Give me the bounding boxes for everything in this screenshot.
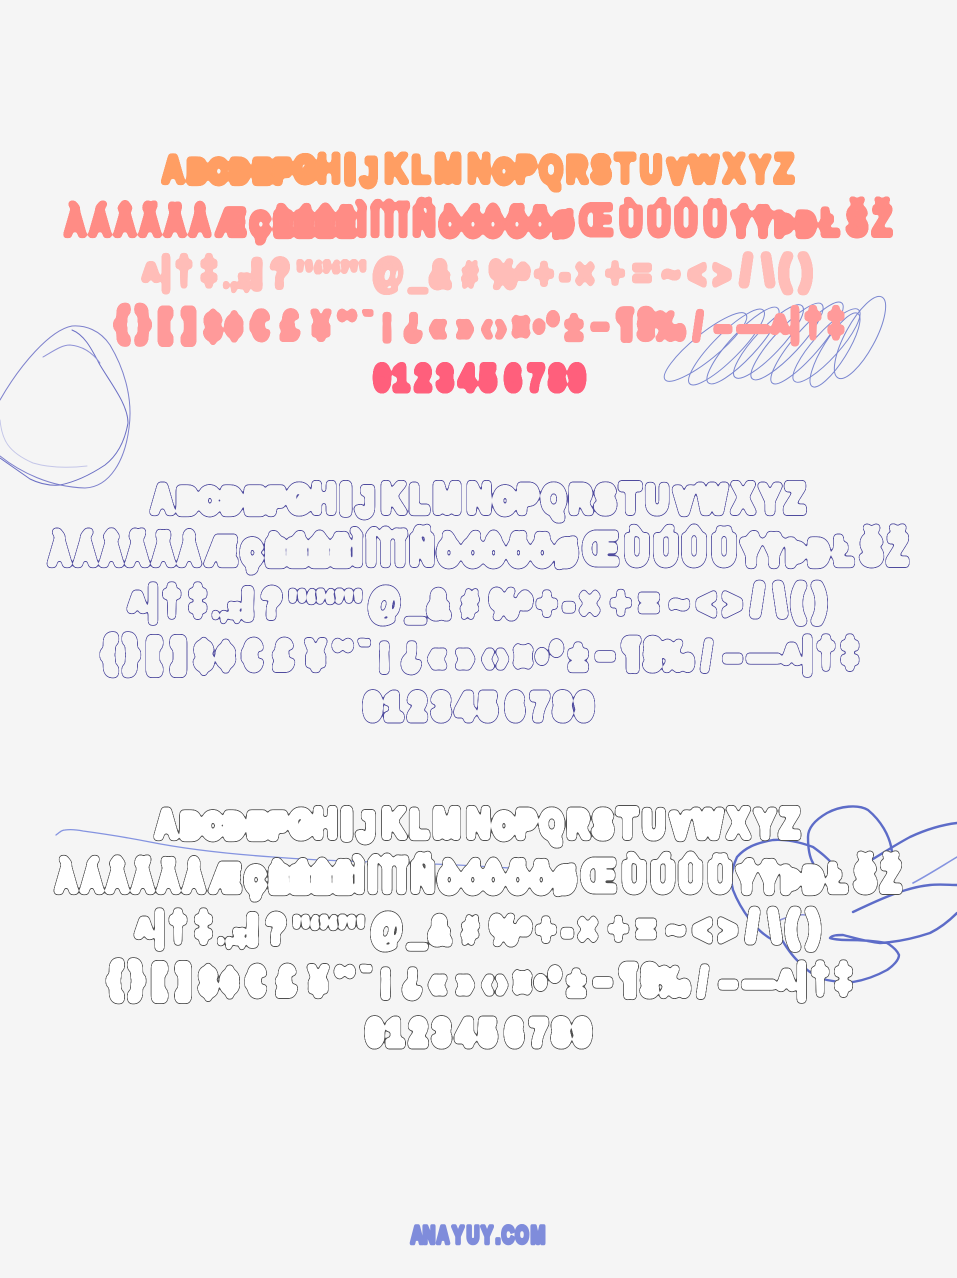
white symbols row: []: [155, 963, 188, 998]
white punctuation row: |†‡: [155, 906, 212, 948]
white symbols row: ¶§: [620, 958, 658, 1000]
outline symbols row: []: [150, 636, 183, 672]
outline symbols row: ^: [784, 640, 799, 677]
scribble: long wavy line, lower section: [56, 830, 510, 868]
filled symbols row: €£¥: [251, 302, 330, 348]
filled symbols row: «»‹›¤•°±−: [430, 307, 608, 348]
filled symbols row: []: [161, 307, 193, 342]
filled symbols row: ‰/–—: [656, 307, 768, 348]
white symbols row: ¡¿: [381, 957, 421, 999]
white alphabet row: J: [357, 804, 375, 850]
outline numerals row: 0123456789: [364, 688, 593, 728]
white symbols row: ^: [779, 967, 794, 1003]
outline symbols row: «»‹›¤•°±−: [429, 636, 614, 678]
white symbols row: |†‡: [798, 958, 852, 1000]
white punctuation row: ^: [137, 915, 152, 951]
white punctuation row: /\(): [748, 906, 819, 948]
outline symbols row: |†‡: [803, 632, 858, 674]
outline punctuation row: /\(): [753, 580, 825, 622]
filled alphabet row: LMNOPQRSTU VWXYZ: [412, 145, 794, 191]
outline symbols row: ‰/–—: [663, 636, 780, 678]
white symbols row: $¢: [200, 962, 238, 1004]
outline accented letters row: ÀÁÂÃÄÅÆÇÈÉÊËÌÍÎÏÑÒÓÔÕÖØŒÙÚÛÜ ÝŸÞÐŁ ŠŽ: [49, 525, 908, 574]
white numerals row: 0123456789: [366, 1013, 591, 1054]
outline symbols row: {}: [104, 631, 137, 673]
filled symbols row: ^: [773, 311, 788, 347]
outline symbols row: ¡¿: [379, 631, 420, 673]
filled alphabet row: ABCDEFGHI: [163, 145, 354, 191]
section: purple outline specimen: [49, 474, 908, 728]
white symbols row: ‰/–—: [659, 962, 774, 1004]
filled punctuation row: .,:;: [223, 264, 250, 293]
outline punctuation row: ^: [130, 588, 145, 625]
outline symbols row: ¶§: [623, 632, 661, 674]
outline alphabet row: LMNOPQRSTU VWXYZ: [410, 474, 805, 521]
section: white-filled outline specimen: [56, 800, 901, 1054]
outline alphabet row: ABCDEFGHI: [152, 474, 350, 521]
scribble: hand-drawn circle, top left: [0, 326, 130, 488]
white alphabet row: K: [382, 800, 406, 846]
scribble: flower loops, lower right: [732, 806, 957, 982]
white punctuation row: .,:;: [218, 920, 246, 949]
filled punctuation row: |†‡: [162, 251, 217, 292]
white punctuation row: ! ?''‘’‘’''@_& # %*+-× ÷= ~<>: [248, 905, 736, 953]
filled alphabet row: J: [360, 149, 378, 195]
white symbols row: «»‹›¤•°±−: [429, 962, 611, 1004]
section: filled specimen: [65, 145, 892, 398]
white accented letters row: ÀÁÂÃÄÅÆÇÈÉÊËÌÍÎÏÑÒÓÔÕÖØŒÙÚÛÜ ÝŸÞÐŁŠŽ: [56, 852, 901, 901]
filled symbols row: ¶§: [617, 303, 654, 344]
white alphabet row: ABCDEFGHI: [156, 800, 351, 846]
filled punctuation row: ! ?''‘’‘’''@_& # %*+-× ÷= ~<>: [252, 249, 730, 296]
filled symbols row: $¢: [205, 307, 242, 348]
white alphabet row: LMNOPQRSTU VWXYZ: [410, 800, 799, 846]
scribble: looping coil, top right: [657, 290, 895, 393]
outline alphabet row: J: [356, 478, 374, 525]
filled symbols row: ¡¿: [382, 302, 422, 343]
outline alphabet row: K: [381, 474, 405, 521]
filled punctuation row: ^: [144, 259, 159, 295]
white symbols row: ©®™: [335, 962, 372, 980]
filled accented letters row: ÀÁÂÃÄÅÆÇÈÉÊËÌÍÎÏÑÒÓÔÕÖØŒÙÚÛÜ ÝŸÞÐŁŠŽ: [65, 197, 892, 245]
white symbols row: €£¥: [247, 958, 328, 1004]
filled numerals row: 0123456789: [374, 358, 585, 398]
outline punctuation row: .,:;: [213, 594, 241, 623]
filled symbols row: |†‡: [791, 303, 844, 344]
white symbols row: {}: [109, 957, 142, 999]
outline punctuation row: ! ?''‘’‘’''@_& # %*+ -× ÷= ~<>: [243, 579, 741, 627]
filled alphabet row: K: [385, 145, 407, 191]
outline symbols row: €£¥: [243, 631, 325, 678]
filled symbols row: ©®™: [338, 308, 374, 325]
outline symbols row: ©®™: [333, 636, 371, 654]
outline symbols row: $¢: [195, 636, 234, 678]
filled punctuation row: /\(): [742, 251, 811, 292]
outline punctuation row: |†‡: [149, 580, 206, 622]
filled symbols row: {}: [116, 302, 149, 343]
footer website label: ANAYUY.COM: [411, 1222, 545, 1249]
